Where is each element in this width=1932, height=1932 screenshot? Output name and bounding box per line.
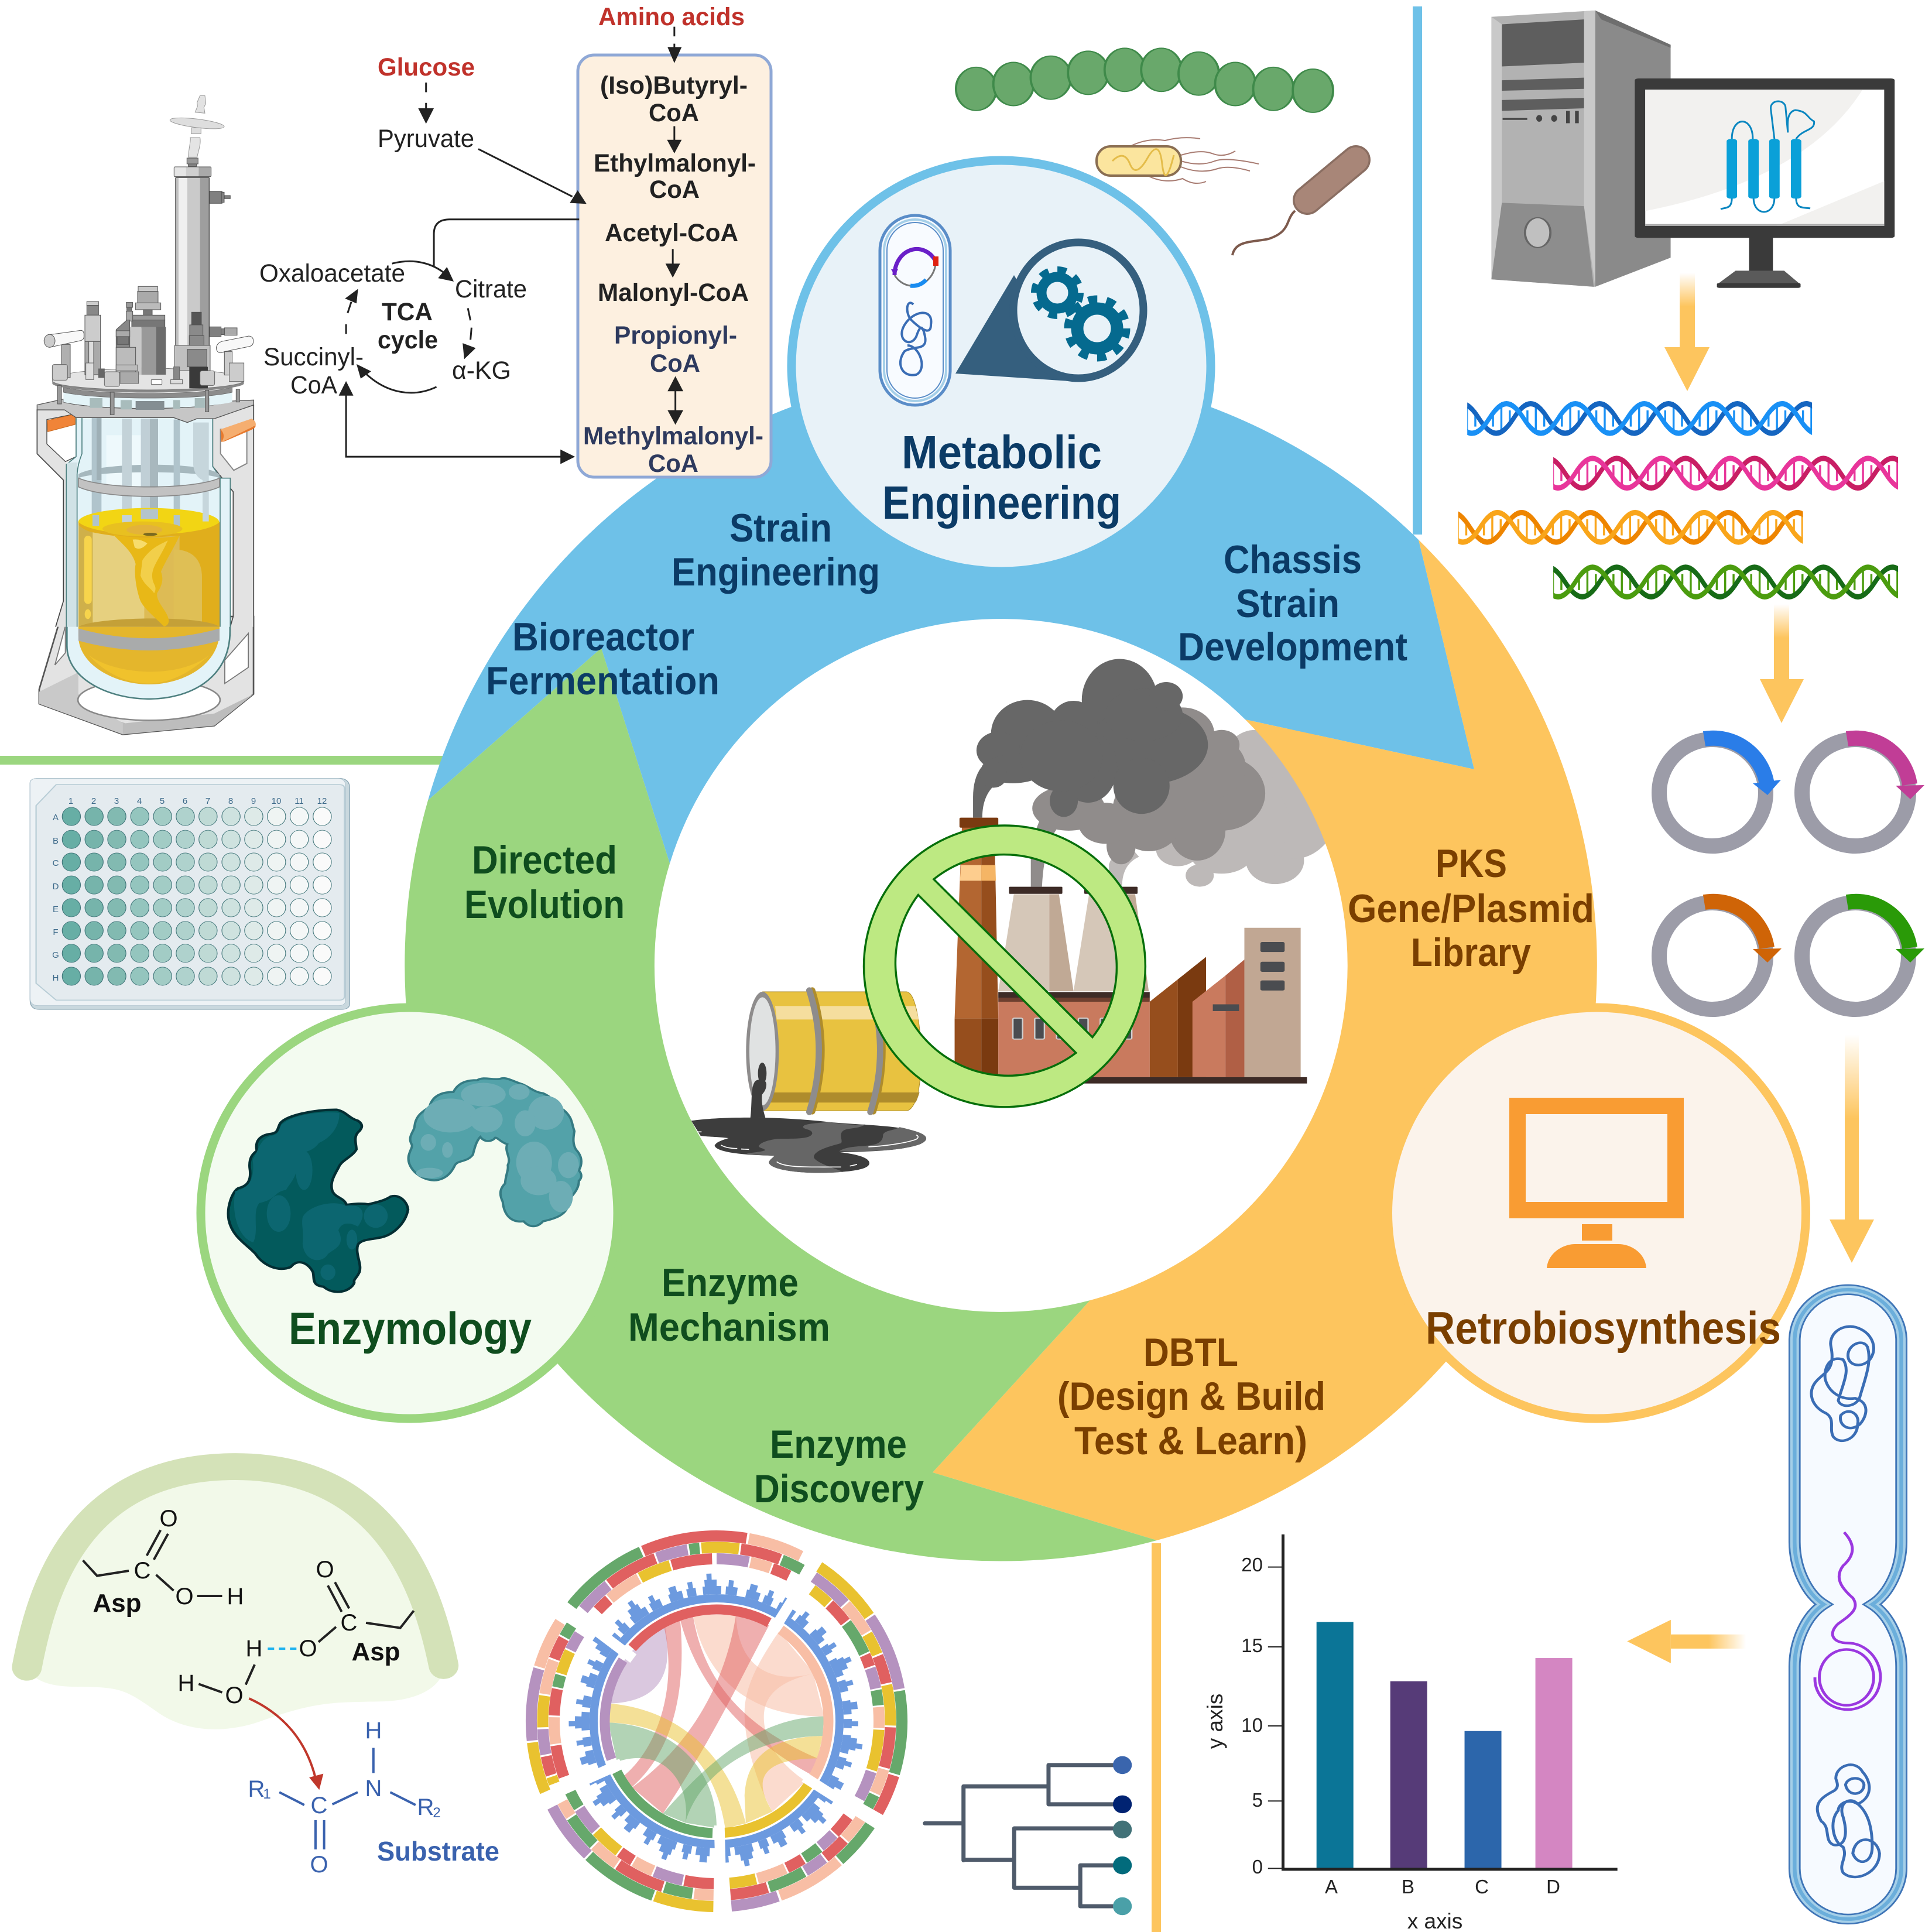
plate labels: 2: [91, 796, 96, 806]
ring segment: orange retrobiosynthesis: [933, 540, 1597, 1540]
ring labels: green: Evolution: [464, 882, 625, 927]
pathway substrates and TCA labels: [259, 3, 745, 399]
substrate labels: [248, 1718, 441, 1878]
circle background: [792, 160, 1211, 571]
enzyme residue labels: O: [175, 1584, 194, 1609]
oil barrel: [746, 991, 922, 1118]
enzyme residue labels: [93, 1506, 400, 1708]
y axis label: y axis: [1203, 1694, 1227, 1749]
enzyme residue labels: C: [341, 1610, 357, 1636]
pathway metabolite labels: [583, 71, 763, 478]
plate labels: 10: [272, 796, 281, 806]
arrow: computer to DNA: [1664, 273, 1710, 391]
enzyme residue labels: C: [134, 1558, 150, 1584]
purple plasmid DNA: [1815, 1532, 1880, 1710]
green DNA helix: [1553, 564, 1898, 600]
panel: metabolic engineering circle: [792, 160, 1211, 571]
phylogenetic tree: [925, 1756, 1132, 1915]
substrate labels: 1: [263, 1786, 271, 1802]
active site pocket: [27, 1467, 444, 1729]
plate labels: 8: [228, 796, 233, 806]
blue DNA helix: [1467, 401, 1813, 436]
pathway metabolite labels: Ethylmalonyl-: [594, 149, 756, 177]
plate labels: D: [53, 882, 59, 892]
enzyme residue labels: Asp: [351, 1638, 400, 1666]
chart tick labels: D: [1546, 1876, 1560, 1897]
icon: brown rod bacterium: [1232, 160, 1356, 255]
panel: retrobiosynthesis circle: [1388, 1008, 1806, 1419]
pathway substrates and TCA labels: Citrate: [455, 275, 527, 303]
ring labels: orange: [1057, 841, 1594, 1463]
computer tower: [1491, 11, 1671, 287]
ring labels: blue: Fermentation: [486, 659, 720, 703]
chart tick labels: B: [1402, 1876, 1414, 1897]
plate labels: A: [53, 813, 59, 823]
icon: plasmid library: [1659, 738, 1924, 1009]
pathway metabolite labels: Methylmalonyl-: [583, 422, 763, 450]
plate labels: [52, 796, 327, 983]
ring labels: blue: Strain: [1236, 581, 1340, 626]
ring labels: green: Enzyme: [770, 1422, 907, 1467]
ring labels: blue: [486, 506, 1407, 703]
circular ring: three segments: [405, 369, 1597, 1561]
chart tick labels: 10: [1241, 1714, 1263, 1736]
arrow: cell to chart: [1627, 1620, 1746, 1663]
substrate labels: H: [365, 1718, 382, 1743]
enzyme residue labels: H: [227, 1584, 244, 1609]
no symbol: [864, 825, 1145, 1107]
center illustration: fossil fuel industry: [691, 659, 1343, 1173]
pathway substrates and TCA labels: cycle: [378, 326, 438, 354]
pathway metabolite labels: Acetyl-CoA: [605, 219, 738, 247]
head plate: [37, 368, 254, 423]
chart tick labels: [1241, 1554, 1560, 1897]
icon: computer with protein model: [1491, 11, 1895, 288]
substrate labels: C: [311, 1793, 327, 1818]
icon: green bacterial chain: [956, 48, 1333, 112]
pathway substrates and TCA labels: TCA: [382, 298, 433, 326]
enzyme residue labels: O: [159, 1506, 178, 1532]
icon: 96-well plate: [30, 779, 350, 1009]
icon: enzymes: [228, 1078, 581, 1292]
ring labels: blue: Strain: [729, 506, 832, 550]
panel: catalytic mechanism: [27, 1467, 499, 1878]
ring labels: orange: (Design & Build: [1057, 1374, 1325, 1419]
enzyme residue labels: O: [299, 1636, 317, 1662]
chart tick labels: 5: [1252, 1789, 1263, 1811]
divider: blue vertical bar: [1413, 6, 1422, 535]
ring labels: green: Enzyme: [662, 1260, 799, 1305]
pathway metabolite labels: CoA: [649, 99, 699, 127]
pathway box: [578, 55, 771, 478]
ring labels: blue: Engineering: [672, 550, 880, 594]
chord diagram: [458, 1463, 975, 1932]
heading: Enzymology: Enzymology: [289, 1303, 532, 1354]
chord sector arcs: [561, 1566, 872, 1877]
substrate labels: O: [310, 1852, 328, 1878]
chart tick labels: 20: [1241, 1554, 1263, 1575]
magenta plasmid: [1802, 738, 1924, 846]
plate labels: 3: [114, 796, 119, 806]
arrow: plasmids to cell: [1830, 1034, 1874, 1263]
frame, glass and culture: [37, 405, 256, 627]
plate labels: F: [53, 927, 59, 937]
heading: Metabolic Engineering: [882, 426, 1121, 529]
enzyme residue labels: H: [246, 1636, 262, 1662]
oil puddle: [691, 1118, 926, 1173]
orange DNA helix: [1458, 509, 1803, 545]
divider: green horizontal bar: [0, 756, 468, 765]
chart tick labels: C: [1475, 1876, 1489, 1897]
protein model on screen: [1721, 101, 1814, 212]
ring labels: blue: Chassis: [1224, 537, 1362, 582]
plate labels: 1: [68, 796, 73, 806]
plate labels: 12: [317, 796, 327, 806]
ring labels: orange: DBTL: [1143, 1330, 1238, 1375]
plate wells: [62, 807, 331, 985]
pathway metabolite labels: CoA: [649, 176, 700, 204]
circle background: [201, 1008, 618, 1419]
ring labels: blue: Development: [1178, 625, 1407, 669]
heading: Metabolic Engineering: Metabolic: [902, 426, 1102, 478]
substrate labels: R: [417, 1794, 434, 1820]
plate labels: 11: [294, 796, 304, 806]
substrate labels: R: [248, 1776, 265, 1802]
ring labels: orange: Library: [1411, 930, 1531, 975]
substrate labels: 2: [433, 1805, 441, 1821]
orange plasmid: [1659, 902, 1782, 1009]
sector gaps: [537, 1555, 882, 1917]
pathway substrates and TCA labels: Amino acids: [598, 3, 745, 31]
heading: Metabolic Engineering: Engineering: [882, 477, 1121, 529]
pathway substrates and TCA labels: Pyruvate: [378, 125, 474, 153]
bar chart: [1203, 1534, 1618, 1932]
green plasmid: [1802, 902, 1924, 1009]
pathway metabolite labels: CoA: [648, 450, 698, 478]
ring labels: green: Mechanism: [628, 1305, 830, 1349]
ring labels: green: Discovery: [754, 1467, 924, 1511]
pathway metabolite labels: Propionyl-: [614, 321, 737, 350]
circle background: [1388, 1008, 1806, 1419]
outer annotation track: [458, 1463, 975, 1932]
divider: orange vertical bar: [1152, 1543, 1161, 1932]
ring segment: green enzymology: [405, 648, 1157, 1561]
histogram track: [515, 1520, 918, 1923]
plate labels: 7: [205, 796, 210, 806]
inner annotation track: [491, 1495, 943, 1932]
bioreactor base and lower vessel: [39, 602, 254, 734]
substrate caption: Substrate: [377, 1836, 499, 1866]
chart bars: [1317, 1622, 1573, 1868]
icon: DNA helices: [1377, 404, 1932, 597]
plate labels: G: [52, 950, 59, 960]
pathway substrates and TCA labels: Succinyl-: [263, 343, 364, 371]
pink DNA helix: [1553, 455, 1898, 491]
icon: orange monitor: [1509, 1098, 1684, 1268]
factory: [955, 818, 1307, 1084]
ring labels: orange: Test & Learn): [1074, 1419, 1307, 1463]
icon: bioreactor: [37, 95, 256, 734]
ring labels: green: [464, 838, 924, 1511]
substrate labels: N: [365, 1776, 382, 1801]
cell wall: [1794, 1290, 1902, 1919]
pathway metabolite labels: CoA: [650, 350, 700, 378]
icon: microbial cells: [956, 48, 1356, 255]
nucleophilic attack arrow: [249, 1698, 323, 1790]
top chromosome: [1811, 1327, 1873, 1441]
ring labels: orange: PKS: [1436, 841, 1507, 886]
chemical bonds: [83, 1530, 416, 1849]
pathway substrates and TCA labels: α-KG: [452, 357, 511, 385]
pathway substrates and TCA labels: CoA: [290, 371, 337, 399]
head plate knobs: [52, 363, 244, 386]
chart axes: [1268, 1534, 1618, 1869]
ring labels: blue: Bioreactor: [512, 615, 694, 659]
enzyme residue labels: H: [178, 1670, 194, 1696]
middle annotation track: [474, 1479, 959, 1932]
monitor: [1635, 78, 1895, 288]
plate labels: E: [53, 905, 59, 914]
plate labels: H: [53, 973, 59, 983]
condenser, filter and fittings: [44, 95, 254, 388]
bottom chromosome: [1817, 1765, 1879, 1877]
pathway substrates and TCA labels: Glucose: [378, 53, 475, 81]
chart tick labels: 15: [1241, 1635, 1263, 1656]
chord ribbons: [608, 1615, 824, 1828]
blue plasmid: [1659, 738, 1781, 846]
pathway metabolite labels: (Iso)Butyryl-: [600, 71, 748, 100]
pathway metabolite labels: Malonyl-CoA: [598, 279, 749, 307]
plate labels: 9: [251, 796, 256, 806]
chart tick labels: A: [1325, 1876, 1338, 1897]
icon: dividing bacterial cell: [1794, 1290, 1902, 1919]
plate labels: C: [53, 858, 59, 868]
plate labels: 5: [160, 796, 165, 806]
enzyme residue labels: O: [225, 1683, 244, 1708]
plate labels: 6: [183, 796, 187, 806]
plate labels: 4: [137, 796, 142, 806]
arrow: DNA to plasmids: [1760, 604, 1804, 723]
pathway substrates and TCA labels: Oxaloacetate: [259, 259, 405, 287]
heading: Retrobiosynthesis: Retrobiosynthesis: [1426, 1302, 1781, 1354]
plate labels: B: [53, 836, 59, 846]
smoke clouds: [973, 659, 1343, 887]
enzyme residue labels: Asp: [93, 1589, 142, 1618]
panel: enzymology circle: [201, 1008, 618, 1419]
plate body: [30, 779, 350, 1009]
icon: engineered cell with magnifier: [880, 215, 1143, 405]
enzyme residue labels: O: [316, 1557, 334, 1582]
icon: yellow flagellated bacterium: [1097, 138, 1259, 183]
chart tick labels: 0: [1252, 1856, 1263, 1878]
pathway arrows: [339, 27, 683, 464]
ring labels: green: Directed: [472, 838, 617, 882]
ring labels: orange: Gene/Plasmid: [1348, 886, 1594, 931]
ring segment: blue metabolic engineering: [428, 369, 1474, 864]
